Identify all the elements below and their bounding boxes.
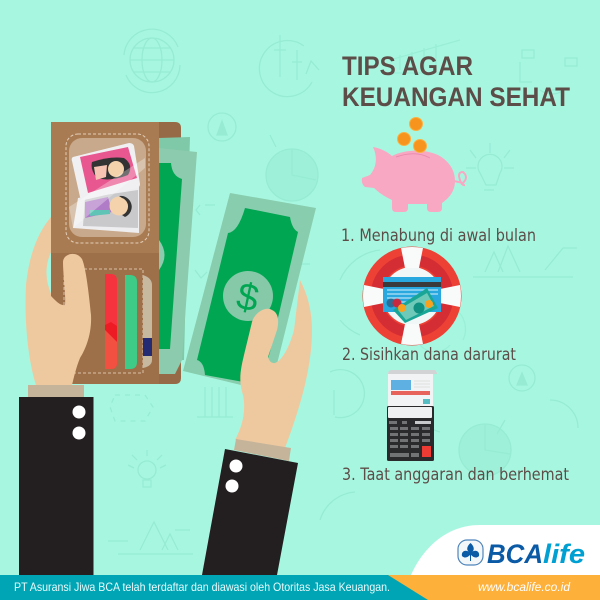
lifebuoy bands <box>363 247 461 345</box>
cards pocket <box>64 269 152 373</box>
wallet front lower panel <box>51 253 159 384</box>
logo panel: life <box>543 539 585 569</box>
footer bar <box>0 575 600 600</box>
logo emblem <box>458 540 483 565</box>
title: KEUANGAN SEHAT <box>342 82 570 112</box>
wallet back flap <box>159 122 181 140</box>
pig body <box>362 147 455 212</box>
coins <box>398 118 426 152</box>
title: TIPS AGAR <box>342 51 473 81</box>
wallet front upper panel <box>51 122 159 254</box>
beige card <box>143 275 152 368</box>
footer disclaimer: PT Asuransi Jiwa BCA telah terdaftar dan diawasi oleh Otoritas Jasa Keuangan. <box>14 580 390 594</box>
money <box>393 288 438 323</box>
title <box>342 51 570 112</box>
upper photo <box>72 143 140 200</box>
wallet bottom back <box>159 360 181 384</box>
left cuff <box>28 385 84 397</box>
icon: calculator and receipt <box>387 370 437 461</box>
red card <box>105 274 117 369</box>
lower photo <box>73 186 139 233</box>
right hand <box>235 280 312 448</box>
left sleeve <box>19 397 94 575</box>
pig tail <box>454 172 466 185</box>
left hand thumb and palm <box>26 254 91 385</box>
left hand back fingers <box>25 217 72 385</box>
calculator <box>387 406 434 461</box>
loose banknote <box>183 193 316 392</box>
tip 1 text: 1. Menabung di awal bulan <box>341 226 536 246</box>
icon: lifebuoy with card and money <box>362 246 462 346</box>
background doodle icons <box>108 29 578 554</box>
footer website: www.bcalife.co.id <box>478 580 570 594</box>
right sleeve <box>202 449 298 575</box>
dollar medallion: $ <box>233 275 262 321</box>
receipt <box>388 370 437 406</box>
logo panel <box>411 525 600 575</box>
icon: piggy bank with coins <box>362 118 466 212</box>
glass glare <box>69 158 145 228</box>
wallet <box>51 122 197 384</box>
banknotes in wallet <box>159 137 197 374</box>
photo window <box>66 134 149 243</box>
tip 2 text: 2. Sisihkan dana darurat <box>342 345 516 365</box>
logo wordmark: BCA <box>487 539 543 569</box>
right cuff <box>234 439 291 461</box>
credit card <box>383 277 441 312</box>
green card <box>125 275 137 369</box>
dollar medallion <box>223 271 273 321</box>
